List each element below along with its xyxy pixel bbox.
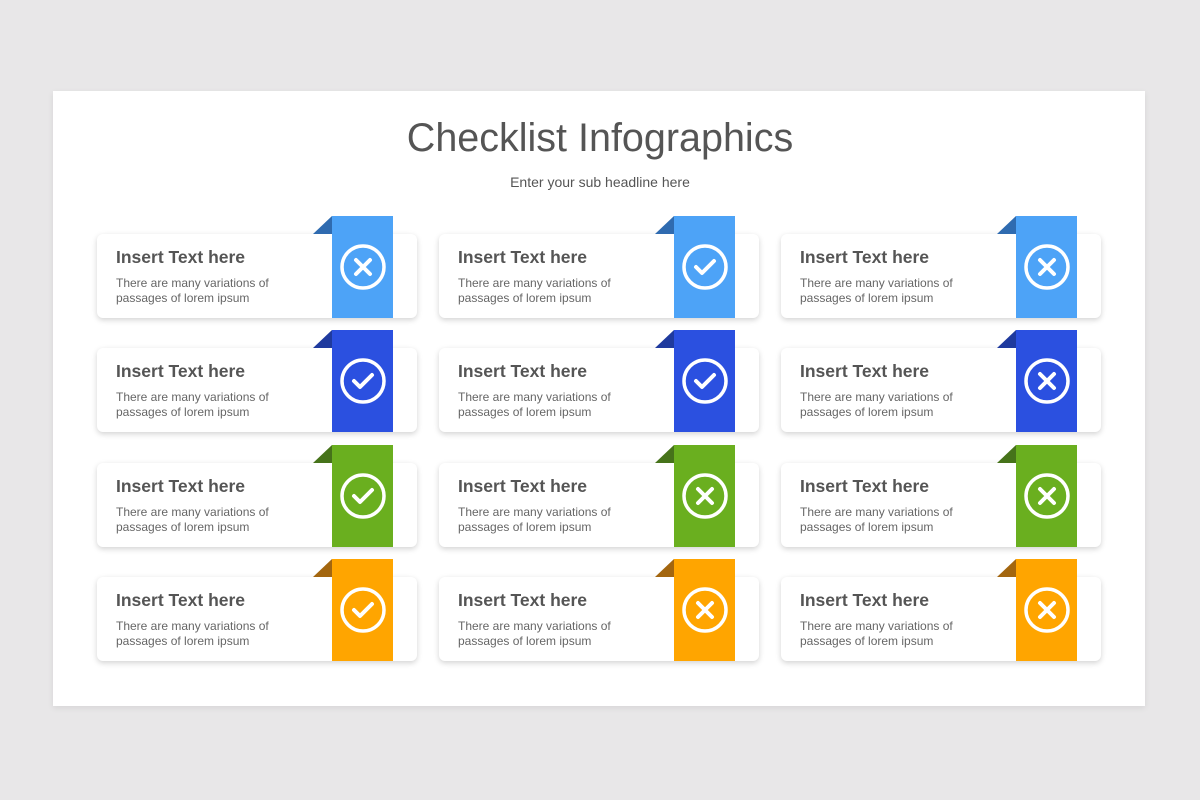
icon tab: check: [655, 330, 735, 432]
item r2c1: passages of lorem ipsum: [116, 405, 249, 419]
item r1c3: passages of lorem ipsum: [800, 291, 933, 305]
item r2c3: [778, 330, 1104, 436]
item r1c1: [94, 216, 420, 322]
item r4c2: [436, 559, 762, 666]
item r2c3: There are many variations of: [800, 390, 953, 404]
icon tab: check: [313, 330, 393, 432]
item r1c1: There are many variations of: [116, 276, 269, 290]
item r4c2: passages of lorem ipsum: [458, 634, 591, 648]
item r4c3: There are many variations of: [800, 619, 953, 633]
icon tab: check: [313, 445, 393, 547]
item r2c2: There are many variations of: [458, 390, 611, 404]
item r1c3: Insert Text here: [800, 247, 929, 267]
item r4c3: passages of lorem ipsum: [800, 634, 933, 648]
item r2c2: passages of lorem ipsum: [458, 405, 591, 419]
icon tab: x: [997, 445, 1077, 547]
item r3c1: There are many variations of: [116, 505, 269, 519]
panel: background card: [53, 91, 1145, 706]
item r1c2: passages of lorem ipsum: [458, 291, 591, 305]
item r4c1: [94, 559, 420, 666]
item r1c3: There are many variations of: [800, 276, 953, 290]
item r4c3: Insert Text here: [800, 590, 929, 610]
item r3c3: [778, 445, 1104, 552]
icon tab: x: [997, 330, 1077, 432]
item r3c3: passages of lorem ipsum: [800, 520, 933, 534]
item r3c2: There are many variations of: [458, 505, 611, 519]
item r3c2: Insert Text here: [458, 476, 587, 496]
item r3c1: Insert Text here: [116, 476, 245, 496]
item r4c1: There are many variations of: [116, 619, 269, 633]
icon tab: x: [313, 216, 393, 318]
item r2c1: There are many variations of: [116, 390, 269, 404]
item r1c1: Insert Text here: [116, 247, 245, 267]
icon tab: check: [655, 216, 735, 318]
item r2c3: Insert Text here: [800, 361, 929, 381]
icon tab: x: [655, 445, 735, 547]
icon tab: x: [997, 559, 1077, 661]
icon tab: x: [997, 216, 1077, 318]
icon tab: check: [313, 559, 393, 661]
item r1c3: [778, 216, 1104, 322]
item r4c3: [778, 559, 1104, 666]
item r2c1: [94, 330, 420, 436]
item r4c1: Insert Text here: [116, 590, 245, 610]
item r3c1: [94, 445, 420, 552]
item r3c3: Insert Text here: [800, 476, 929, 496]
title: Checklist Infographics: [407, 116, 793, 160]
icon tab: x: [655, 559, 735, 661]
item r3c3: There are many variations of: [800, 505, 953, 519]
item r1c2: Insert Text here: [458, 247, 587, 267]
item r1c1: passages of lorem ipsum: [116, 291, 249, 305]
item r2c3: passages of lorem ipsum: [800, 405, 933, 419]
item r3c2: passages of lorem ipsum: [458, 520, 591, 534]
item r2c1: Insert Text here: [116, 361, 245, 381]
item r1c2: [436, 216, 762, 322]
item r4c2: There are many variations of: [458, 619, 611, 633]
item r1c2: There are many variations of: [458, 276, 611, 290]
item r2c2: [436, 330, 762, 436]
item r4c2: Insert Text here: [458, 590, 587, 610]
item r3c2: [436, 445, 762, 552]
item r4c1: passages of lorem ipsum: [116, 634, 249, 648]
item r3c1: passages of lorem ipsum: [116, 520, 249, 534]
subtitle: Enter your sub headline here: [510, 174, 690, 190]
item r2c2: Insert Text here: [458, 361, 587, 381]
